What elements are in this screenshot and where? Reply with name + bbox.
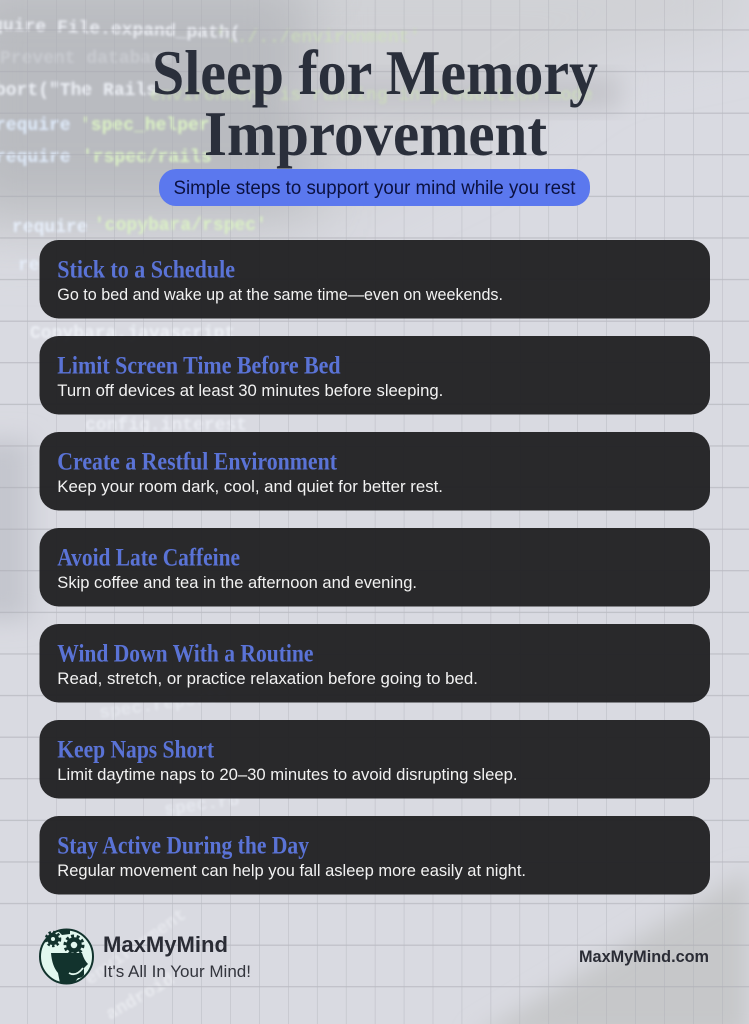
panel: stay active: Regular movement can help you fall asleep more easily at night.	[57, 861, 526, 880]
background: blurred code photo: environment	[82, 905, 191, 990]
icon: MaxMyMind logo	[40, 930, 93, 984]
background: blurred code photo: spec.rb	[163, 791, 241, 821]
panel: restful environment: Create a Restful Environment	[57, 448, 338, 476]
panel: restful environment: Keep your room dark, cool, and quiet for better rest.	[57, 477, 443, 496]
panel: stay active	[40, 816, 710, 894]
title: Improvement	[204, 98, 548, 169]
subtitle pill	[159, 169, 590, 206]
background: blurred code photo: 'copybara/rspec'	[94, 216, 267, 236]
brand name and tagline	[103, 932, 251, 981]
background: blurred code photo: '../../environment'	[215, 28, 420, 48]
background: blurred code photo: re	[18, 256, 40, 276]
panel: wind down	[40, 624, 710, 702]
background: blurred code photo: 'rspec/rails'	[82, 148, 222, 168]
background: blurred code photo: spec.reports	[98, 686, 229, 724]
panel: keep naps short: Keep Naps Short	[57, 736, 215, 764]
panel: limit screen time: Limit Screen Time Before Bed	[57, 352, 341, 380]
panel: keep naps short	[40, 720, 710, 798]
panel: wind down: Read, stretch, or practice relaxation before going to bed.	[57, 669, 478, 688]
panel: keep naps short: Limit daytime naps to 20–30 minutes to avoid disrupting sleep.	[57, 765, 518, 784]
background: blurred code photo: require	[12, 218, 88, 238]
panel: wind down: Wind Down With a Routine	[57, 640, 313, 668]
panel: limit screen time	[40, 336, 710, 414]
background: blurred code photo: android	[103, 970, 178, 1024]
panel: avoid late caffeine: Skip coffee and tea in the afternoon and evening.	[57, 573, 417, 592]
title: Sleep for Memory	[152, 37, 598, 108]
background: blurred code photo: Copybara.javascript	[30, 324, 235, 344]
background: blurred code photo: Prevent database	[0, 49, 173, 69]
website url: MaxMyMind.com	[579, 947, 709, 966]
panel: stick to a schedule: Stick to a Schedule	[57, 256, 235, 284]
subtitle pill: Simple steps to support your mind while you rest	[174, 178, 576, 199]
panel: limit screen time: Turn off devices at least 30 minutes before sleeping.	[57, 381, 443, 400]
panel: avoid late caffeine	[40, 528, 710, 606]
panel: stay active: Stay Active During the Day	[57, 832, 309, 860]
background: blurred code photo: config.interest	[85, 416, 247, 436]
background: blurred code photo: environment is running in production mode	[150, 86, 593, 106]
panel: stick to a schedule	[40, 240, 710, 318]
brand name and tagline: It's All In Your Mind!	[103, 962, 251, 981]
panel: stick to a schedule: Go to bed and wake up at the same time—even on weekends.	[57, 285, 503, 304]
brand name and tagline: MaxMyMind	[103, 932, 228, 957]
panel: avoid late caffeine: Avoid Late Caffeine	[57, 544, 240, 572]
background: blurred code photo: 'spec_helper'	[80, 116, 220, 136]
title	[152, 37, 598, 169]
panel: restful environment	[40, 432, 710, 510]
